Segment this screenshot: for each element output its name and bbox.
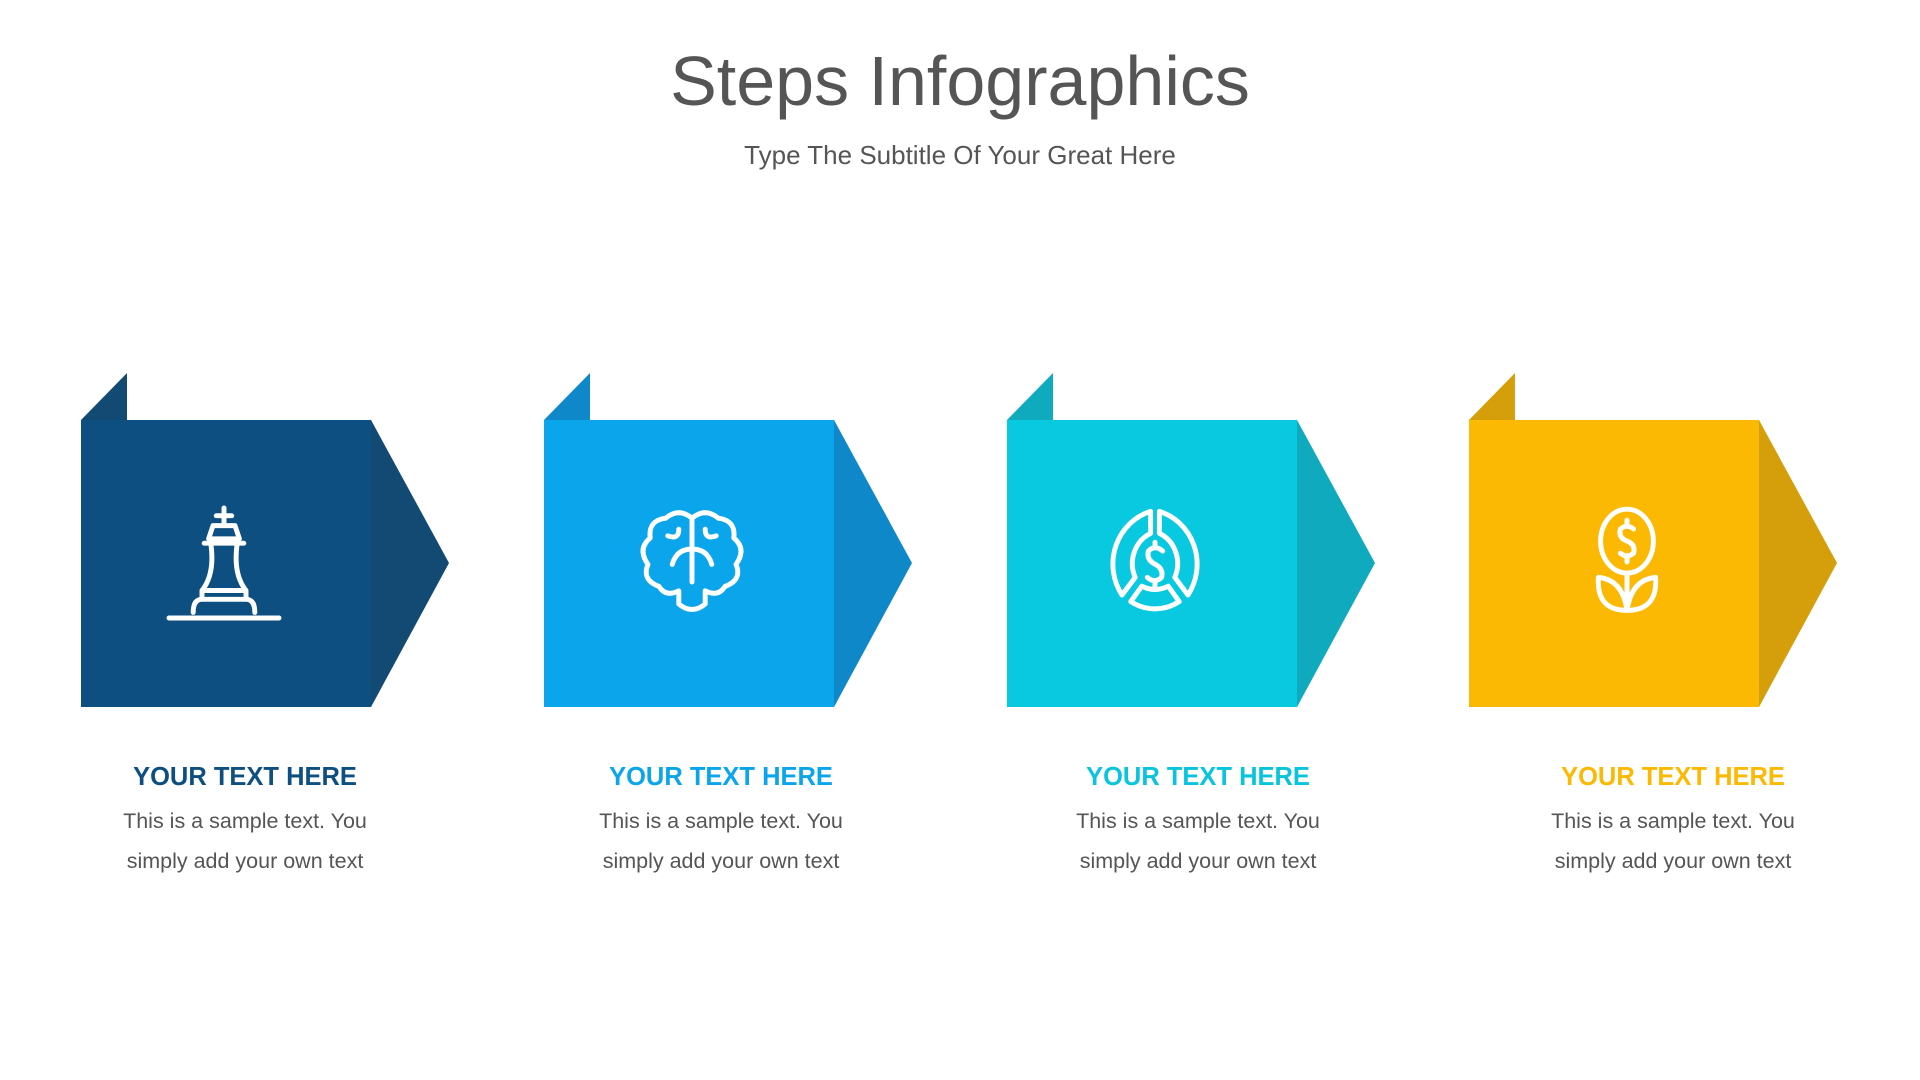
step 1 text <box>123 763 367 873</box>
text: YOUR TEXT HERE <box>609 763 833 791</box>
text: This is a sample text. You <box>1076 809 1320 833</box>
text: This is a sample text. You <box>599 809 843 833</box>
icon: money plant <box>1598 509 1656 610</box>
title: Steps Infographics <box>670 42 1250 120</box>
text: simply add your own text <box>127 849 363 873</box>
step 4 text <box>1551 763 1795 873</box>
subtitle: Type The Subtitle Of Your Great Here <box>744 140 1176 170</box>
text: This is a sample text. You <box>1551 809 1795 833</box>
text: This is a sample text. You <box>123 809 367 833</box>
panel 4 <box>1469 373 1837 707</box>
text: YOUR TEXT HERE <box>133 763 357 791</box>
panel 3 <box>1007 373 1375 707</box>
step 2 text <box>599 763 843 873</box>
text: simply add your own text <box>1080 849 1316 873</box>
text: YOUR TEXT HERE <box>1561 763 1785 791</box>
step 3 text <box>1076 763 1320 873</box>
icon: chess king <box>169 508 279 618</box>
icon: money chart <box>1113 511 1197 609</box>
text: YOUR TEXT HERE <box>1086 763 1310 791</box>
panel 1 <box>81 373 449 707</box>
icon: brain <box>643 513 741 610</box>
panel 2 <box>544 373 912 707</box>
text: simply add your own text <box>1555 849 1791 873</box>
text: simply add your own text <box>603 849 839 873</box>
